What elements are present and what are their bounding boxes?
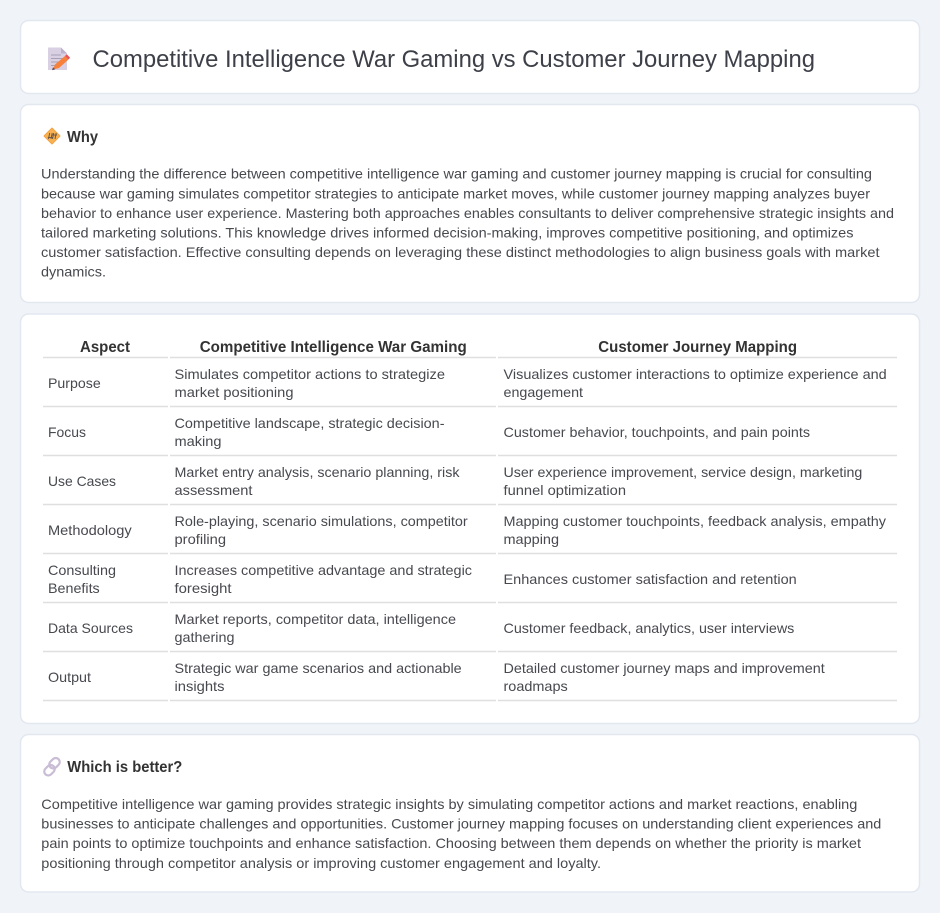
icon: chain link xyxy=(43,756,61,777)
row: purpose: Visualizes customer interactions to optimize experience and xyxy=(504,366,887,382)
text block: why paragraph xyxy=(41,166,894,280)
row: consulting benefits: Increases competitive advantage and strategic xyxy=(174,562,472,578)
row: purpose xyxy=(48,366,887,400)
row: use cases: assessment xyxy=(174,482,253,498)
table header row: Customer Journey Mapping xyxy=(598,339,797,356)
row: use cases xyxy=(48,464,862,498)
panel: which is better xyxy=(20,734,920,892)
icon: memo with pencil xyxy=(48,48,70,70)
row: consulting benefits: Consulting xyxy=(48,562,116,578)
row: use cases: Market entry analysis, scenario planning, risk xyxy=(174,464,461,480)
row: use cases: User experience improvement, service design, marketing xyxy=(504,464,862,480)
row: data sources: Customer feedback, analytics, user interviews xyxy=(504,620,794,636)
row: data sources: gathering xyxy=(174,629,234,645)
row: output xyxy=(48,660,825,694)
row: focus xyxy=(48,415,810,449)
icon: orange diamond xyxy=(44,128,60,144)
text block: why paragraph: Understanding the difference between competitive intelligence war gaming and customer journey mapping is crucial for consulting xyxy=(41,166,872,182)
text block: why paragraph: because war gaming simulates competitor strategies to anticipate market moves, while customer journey mapping analyzes buyer xyxy=(41,185,870,201)
row: methodology: profiling xyxy=(174,531,226,547)
row: purpose: Purpose xyxy=(48,375,101,391)
text block: why paragraph: dynamics. xyxy=(41,264,106,280)
row: methodology: mapping xyxy=(504,531,559,547)
row: focus: Competitive landscape, strategic decision- xyxy=(174,415,445,431)
row: methodology: Role-playing, scenario simulations, competitor xyxy=(174,513,468,529)
panel: why xyxy=(20,104,920,302)
row: methodology xyxy=(48,513,886,547)
row: purpose: Simulates competitor actions to strategize xyxy=(174,366,445,382)
row: data sources: Market reports, competitor data, intelligence xyxy=(174,611,456,627)
row: focus: Focus xyxy=(48,424,86,440)
heading: why: Why xyxy=(67,129,98,146)
row: output: insights xyxy=(174,678,224,694)
row: output: Detailed customer journey maps and improvement xyxy=(504,660,825,676)
text block: which is better paragraph: positioning through competitor analysis or improving customer engagement and loyalty. xyxy=(41,855,601,871)
row: methodology: Mapping customer touchpoints, feedback analysis, empathy xyxy=(504,513,886,529)
row: purpose: engagement xyxy=(504,384,583,400)
row: consulting benefits: Enhances customer satisfaction and retention xyxy=(504,571,797,587)
text block: which is better paragraph: pain points to optimize touchpoints and enhance satisfaction. Choosing between them depends on whether the priority is market xyxy=(41,835,861,851)
row: use cases: Use Cases xyxy=(48,473,116,489)
row: focus: Customer behavior, touchpoints, and pain points xyxy=(504,424,810,440)
text block: why paragraph: tailored marketing solutions. This knowledge drives informed decision-making, improves competitive positioning, and optimizes xyxy=(41,224,854,240)
title: Competitive Intelligence War Gaming vs Customer Journey Mapping xyxy=(92,46,815,73)
panel: title header xyxy=(20,20,920,94)
row: consulting benefits: Benefits xyxy=(48,580,100,596)
text block: why paragraph: behavior to enhance user experience. Mastering both approaches enables consultants to deliver comprehensive strategic insights and xyxy=(41,205,894,221)
row: consulting benefits xyxy=(48,562,797,596)
table header row: Aspect xyxy=(80,339,131,356)
table header row xyxy=(80,339,797,356)
row: use cases: funnel optimization xyxy=(504,482,626,498)
row: consulting benefits: foresight xyxy=(174,580,232,596)
row: output: roadmaps xyxy=(504,678,568,694)
text block: which is better paragraph: businesses to anticipate challenges and opportunities. Customer journey mapping focuses on understanding client experiences and xyxy=(41,816,881,832)
row: output: Output xyxy=(48,669,91,685)
text block: why paragraph: customer satisfaction. Effective consulting depends on leveraging these distinct methodologies to align business goals with market xyxy=(41,244,880,260)
heading: which is better: Which is better? xyxy=(67,759,182,776)
row: purpose: market positioning xyxy=(174,384,294,400)
row: data sources xyxy=(48,611,794,645)
row: data sources: Data Sources xyxy=(48,620,133,636)
panel: comparison table xyxy=(20,314,920,724)
table header row: Competitive Intelligence War Gaming xyxy=(200,339,467,356)
row: focus: making xyxy=(174,433,222,449)
text block: which is better paragraph xyxy=(41,796,881,871)
text block: which is better paragraph: Competitive intelligence war gaming provides strategic insights by simulating competitor actions and market reactions, enabling xyxy=(41,796,857,812)
row: methodology: Methodology xyxy=(48,522,132,538)
row: output: Strategic war game scenarios and actionable xyxy=(174,660,462,676)
